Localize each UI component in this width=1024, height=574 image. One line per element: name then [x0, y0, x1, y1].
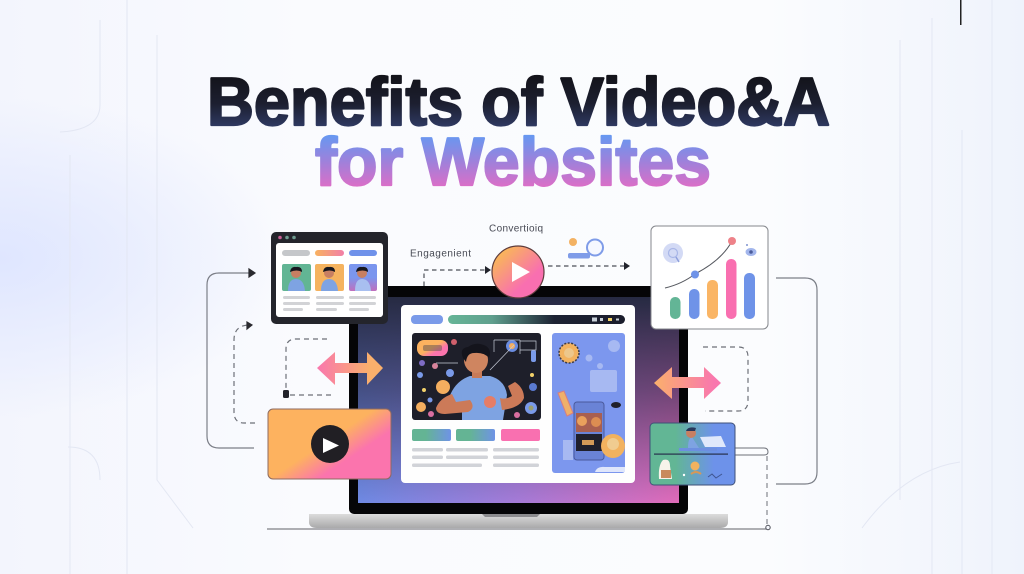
user icon	[568, 238, 603, 258]
trend points	[691, 237, 736, 278]
trend curve	[665, 241, 732, 288]
side illustration panel	[552, 333, 625, 473]
person	[436, 344, 524, 420]
search icon	[663, 243, 683, 263]
title: for Websites	[315, 124, 711, 200]
video play icon	[311, 425, 349, 463]
dark bird	[611, 402, 621, 408]
laptop base	[309, 514, 728, 528]
page nav pill	[411, 315, 443, 324]
white cloud	[595, 467, 625, 472]
connector marker	[283, 390, 289, 398]
page text lines	[412, 448, 539, 467]
connector: dashed line left	[234, 322, 331, 423]
person with laptop	[679, 427, 726, 451]
window dots	[278, 236, 296, 239]
laptop screen	[358, 297, 679, 503]
chart card	[651, 226, 768, 329]
thumbnail: orange	[315, 264, 344, 291]
video illustration	[412, 333, 541, 420]
page buttons	[412, 429, 540, 441]
header pills	[282, 250, 377, 256]
window content	[276, 243, 383, 317]
bars	[670, 259, 755, 319]
seated figure	[659, 460, 672, 479]
browser window card	[271, 232, 388, 324]
connector: solid line left	[207, 269, 255, 448]
web page panel	[401, 305, 635, 483]
phone	[574, 402, 604, 460]
baseline	[267, 528, 768, 530]
top right tick mark	[960, 0, 962, 25]
small figure	[683, 462, 722, 478]
thumbnail: blue	[349, 264, 377, 291]
connector: dashed bracket right	[703, 347, 748, 411]
laptop body	[349, 286, 688, 514]
dashed arrow to play	[424, 266, 491, 286]
small icon	[746, 244, 756, 256]
thumbnail: green	[282, 264, 311, 291]
title	[207, 64, 830, 200]
double arrow right	[654, 367, 721, 399]
page top bar	[448, 315, 625, 324]
laptop	[309, 286, 728, 528]
faint shapes	[563, 340, 620, 460]
thumbnail captions	[283, 296, 376, 311]
title: Benefits of Video&A	[207, 64, 830, 140]
top bar icons	[592, 318, 619, 322]
connector: solid line right	[776, 278, 817, 484]
base notch	[482, 514, 540, 517]
pencil	[558, 391, 573, 416]
label: conversion: Convertioiq	[489, 224, 543, 234]
dashed arrow from play	[548, 262, 630, 270]
coin character	[601, 434, 625, 458]
badge	[417, 340, 448, 356]
small people card	[650, 423, 735, 485]
sun badge	[559, 343, 579, 363]
video card	[268, 409, 391, 479]
baseline end marker	[766, 525, 770, 530]
floating doodles	[416, 339, 537, 418]
connector pipes right	[735, 448, 768, 524]
card divider	[654, 454, 728, 455]
double arrow left	[317, 352, 383, 385]
label: engagement: Engagenient	[410, 248, 471, 260]
play button	[492, 246, 544, 298]
